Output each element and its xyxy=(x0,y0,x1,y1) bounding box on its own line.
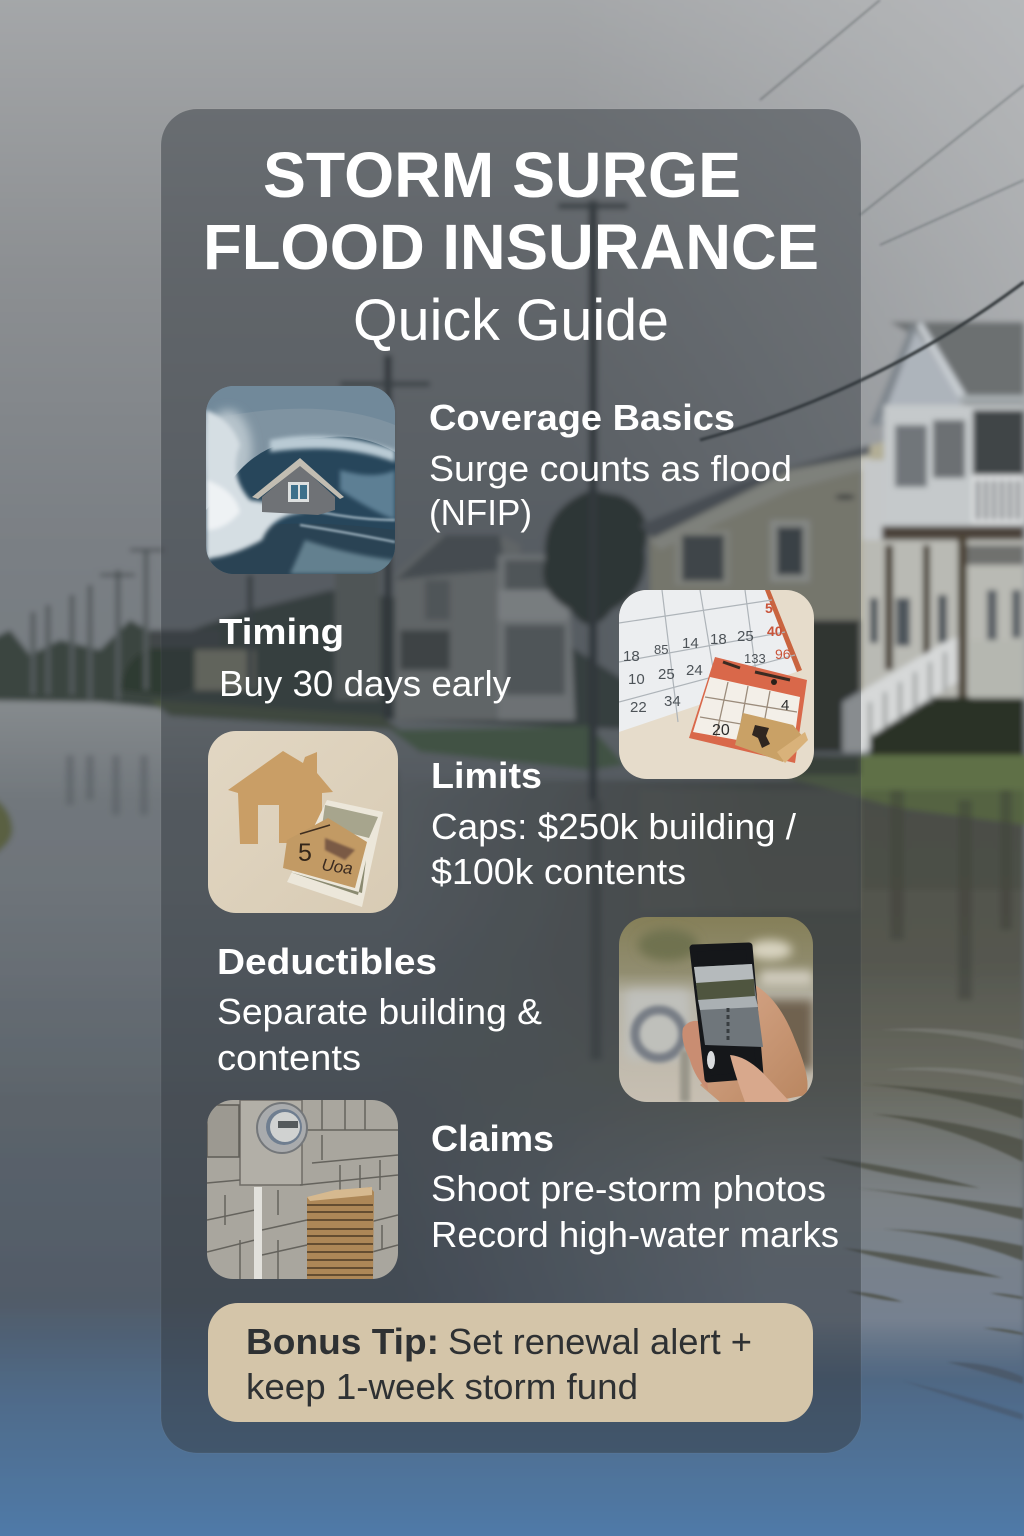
heading and text: deductibles: Separate building & xyxy=(217,991,542,1032)
heading and text: claims xyxy=(431,1118,839,1255)
icon: calendar: 85 xyxy=(654,642,668,657)
heading and text: claims: Claims xyxy=(431,1118,554,1159)
icon: wooden house and cash: Uoa xyxy=(320,855,354,878)
heading and text: timing: Buy 30 days early xyxy=(219,663,511,704)
icon: calendar: 10 xyxy=(628,671,645,688)
icon: calendar: 20 xyxy=(712,722,730,739)
callout: bonus tip: Set renewal alert + xyxy=(448,1321,752,1362)
icon: calendar: 4 xyxy=(781,697,789,714)
heading and text: limits xyxy=(431,755,796,892)
heading and text: limits: $100k contents xyxy=(431,851,686,892)
main translucent panel xyxy=(161,109,861,1453)
icon: calendar: 18 xyxy=(710,631,727,648)
icon: calendar xyxy=(619,590,814,779)
heading and text: deductibles: contents xyxy=(217,1037,361,1078)
icon: calendar: 25 xyxy=(737,628,754,645)
heading and text: claims: Shoot pre-storm photos xyxy=(431,1168,826,1209)
icon: phone photographing water xyxy=(619,917,813,1102)
icon: calendar: 5 xyxy=(765,600,773,616)
heading and text: claims: Record high-water marks xyxy=(431,1214,839,1255)
icon: calendar: 18 xyxy=(623,648,640,665)
water ripples xyxy=(820,1028,1024,1420)
icon: calendar: 96 xyxy=(775,646,791,662)
callout: bonus tip: Bonus Tip: xyxy=(246,1321,439,1362)
title: FLOOD INSURANCE xyxy=(203,211,819,283)
icon: calendar: 14 xyxy=(682,635,699,652)
icon: shingle wall with meter and wood stack xyxy=(207,1100,398,1279)
callout: bonus tip xyxy=(208,1303,813,1422)
heading and text: limits: Limits xyxy=(431,755,542,796)
wires xyxy=(700,0,1024,440)
heading and text: limits: Caps: $250k building / xyxy=(431,806,796,847)
title: Quick Guide xyxy=(353,288,669,353)
heading and text: timing xyxy=(219,611,511,704)
icon: calendar: 25 xyxy=(658,666,675,683)
heading: coverage basics: Coverage Basics xyxy=(429,397,735,438)
heading and text: timing: Timing xyxy=(219,611,344,652)
icon: calendar: 133 xyxy=(744,651,766,666)
icon: wooden house and cash xyxy=(208,731,398,913)
icon: calendar: 34 xyxy=(664,693,681,710)
text: coverage description: Surge counts as flood xyxy=(429,448,792,489)
icon: calendar: 24 xyxy=(686,662,703,679)
icon: wooden house and cash: 5 xyxy=(298,839,312,867)
icon: calendar: 22 xyxy=(630,699,647,716)
heading and text: deductibles xyxy=(217,941,542,1078)
icon: calendar: 40 xyxy=(767,623,783,639)
callout: bonus tip: keep 1-week storm fund xyxy=(246,1366,638,1407)
title: STORM SURGE xyxy=(263,139,741,211)
title xyxy=(203,139,819,353)
text: coverage description xyxy=(429,448,792,533)
heading: coverage basics xyxy=(429,397,792,533)
heading and text: deductibles: Deductibles xyxy=(217,941,437,982)
icon: house on storm wave xyxy=(204,386,395,574)
text: coverage description: (NFIP) xyxy=(429,492,532,533)
